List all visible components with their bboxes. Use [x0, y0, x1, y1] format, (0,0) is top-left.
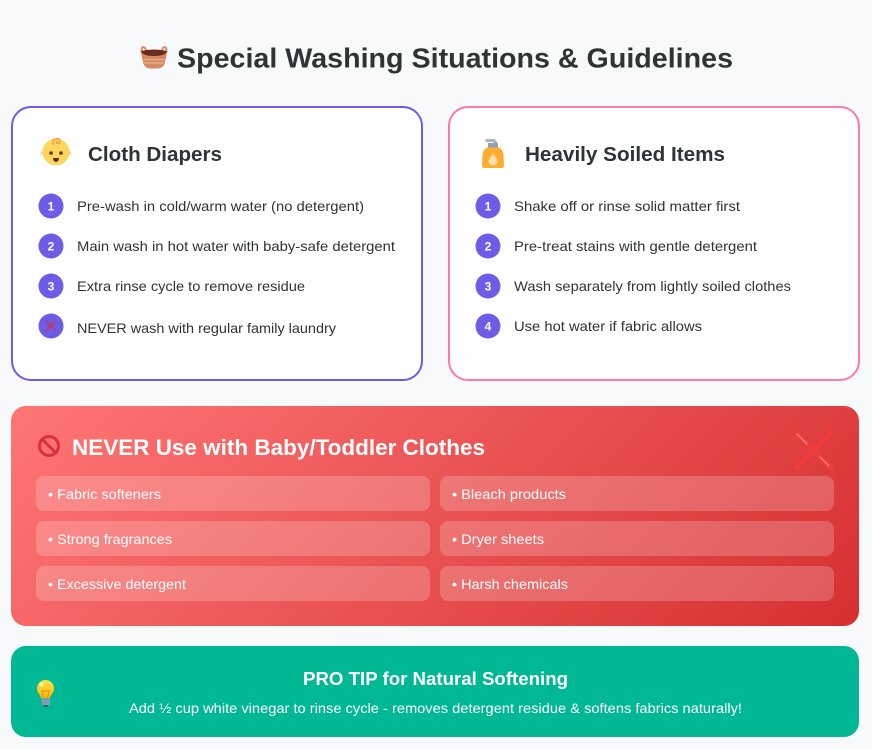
panel: heavily soiled items [449, 107, 859, 380]
step 1 [38, 194, 364, 218]
step 1: 1 [48, 200, 55, 214]
card heading: Cloth Diapers [88, 144, 222, 166]
icon: prohibited [40, 436, 58, 456]
item: bleach products [440, 476, 834, 511]
item: harsh chemicals [440, 566, 834, 601]
item: strong fragrances [36, 521, 430, 556]
step 1: Shake off or rinse solid matter first [514, 198, 740, 214]
item: harsh chemicals: • Harsh chemicals [452, 576, 568, 592]
warning step [38, 314, 336, 338]
step 3: 3 [48, 280, 55, 294]
warning step: NEVER wash with regular family laundry [77, 320, 336, 336]
step 1: 1 [485, 200, 492, 214]
step 1: Pre-wash in cold/warm water (no detergent) [77, 198, 364, 214]
icon: large cross [796, 434, 830, 468]
icon: basket [140, 47, 168, 68]
tip text: Add ½ cup white vinegar to rinse cycle - removes detergent residue & softens fabrics naturally! [129, 700, 742, 716]
step 3 [476, 274, 791, 298]
item: dryer sheets: • Dryer sheets [452, 531, 544, 547]
step 3: Extra rinse cycle to remove residue [77, 278, 305, 294]
tip heading: PRO TIP for Natural Softening [303, 669, 568, 689]
step 2: Main wash in hot water with baby-safe detergent [77, 238, 395, 254]
step 4: Use hot water if fabric allows [514, 318, 702, 334]
icon: soap bottle [482, 140, 504, 168]
step 2: Pre-treat stains with gentle detergent [514, 238, 757, 254]
item: bleach products: • Bleach products [452, 486, 566, 502]
item: fabric softeners [36, 476, 430, 511]
panel: never use [11, 406, 859, 626]
step 1 [476, 194, 740, 218]
step 2 [38, 234, 395, 258]
icon: light bulb [37, 680, 54, 707]
step 3 [38, 274, 305, 298]
step 4: 4 [485, 320, 492, 334]
heading text: Special Washing Situations & Guidelines [177, 42, 733, 74]
title [140, 42, 733, 74]
item: fabric softeners: • Fabric softeners [48, 486, 161, 502]
icon: baby [41, 138, 71, 166]
item: strong fragrances: • Strong fragrances [48, 531, 172, 547]
item: dryer sheets [440, 521, 834, 556]
panel heading: NEVER Use with Baby/Toddler Clothes [72, 435, 485, 460]
step 3: 3 [485, 280, 492, 294]
step 2 [476, 234, 757, 258]
panel: pro tip [11, 646, 859, 737]
item: excessive detergent: • Excessive detergent [48, 576, 186, 592]
card heading: Heavily Soiled Items [525, 144, 725, 166]
item: excessive detergent [36, 566, 430, 601]
step 2: 2 [485, 240, 492, 254]
step 4 [476, 314, 702, 338]
step 2: 2 [48, 240, 55, 254]
step 3: Wash separately from lightly soiled clothes [514, 278, 791, 294]
panel: cloth diapers [12, 107, 422, 380]
